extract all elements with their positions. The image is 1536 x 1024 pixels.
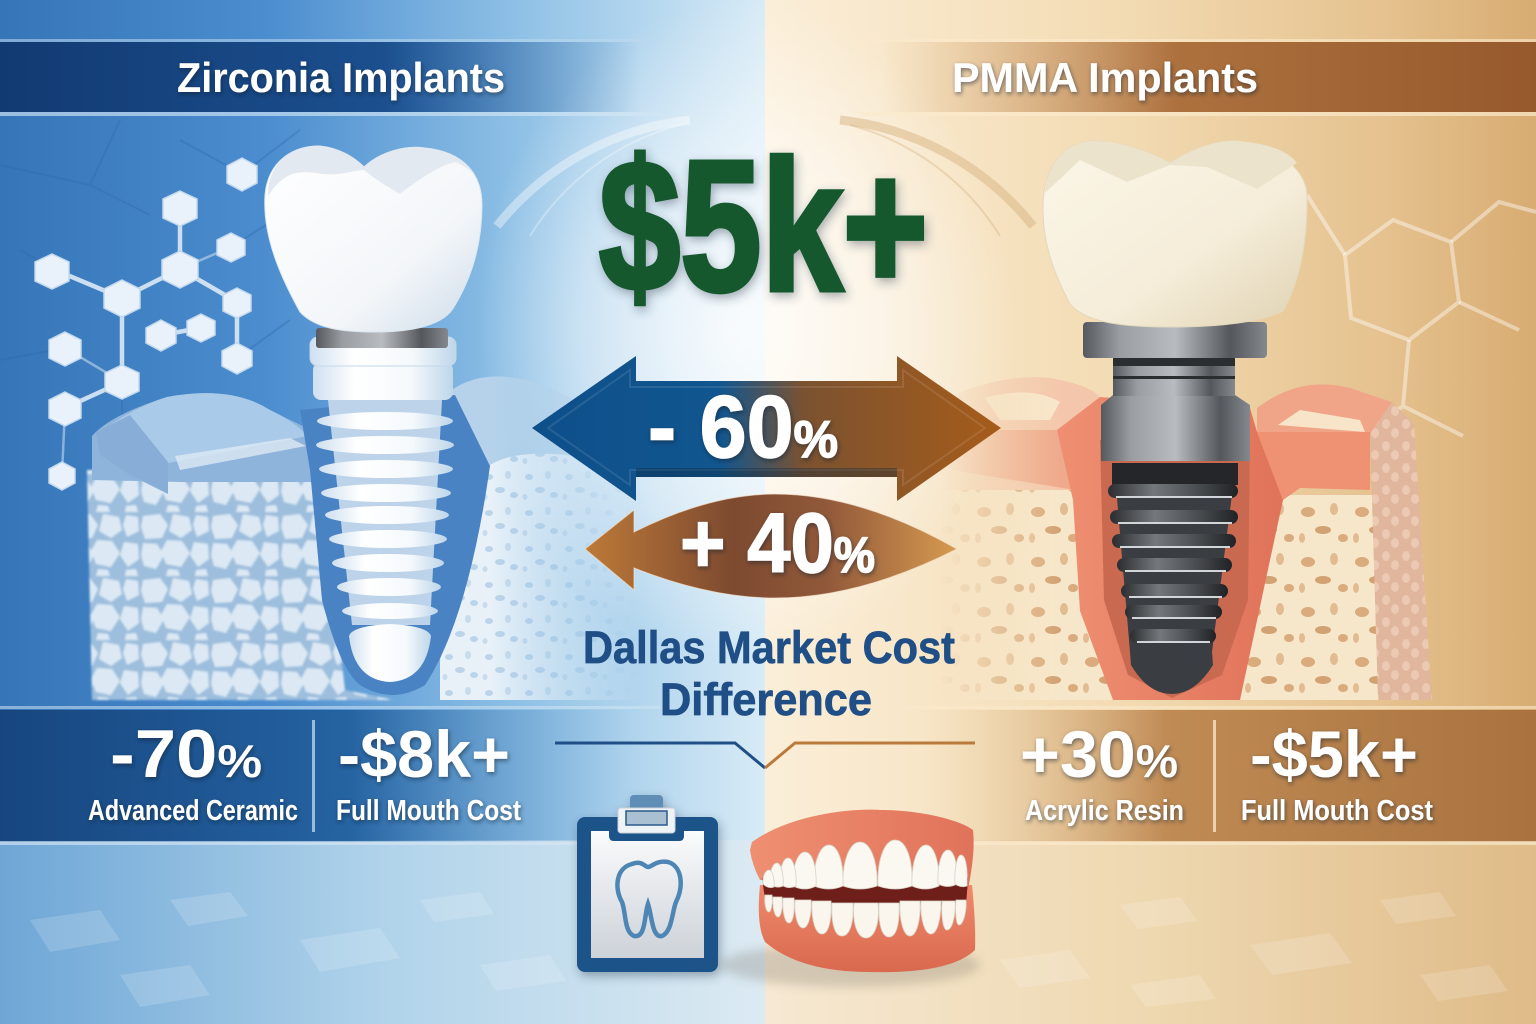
background: blue zirconia half: [0, 0, 765, 1024]
stat: +30%: +30%: [1020, 717, 1178, 791]
bone left block: [87, 470, 395, 700]
bone right block: [440, 376, 618, 700]
gum socket: [1057, 397, 1283, 700]
lower gum: [759, 885, 975, 972]
implant screw: [316, 400, 454, 682]
label: +40%: + 40%: [680, 496, 875, 590]
cream crown: [1043, 141, 1307, 327]
panel: molecule network: [0, 120, 300, 490]
implant abutment: [310, 328, 456, 400]
stat: -$8k+: [336, 717, 521, 827]
icon: clipboard with tooth: [577, 795, 718, 972]
bone left block: [952, 377, 1113, 700]
upper teeth: [763, 840, 967, 889]
stat: -70%: Advanced Ceramic: [88, 795, 298, 827]
central glow: [475, 0, 1015, 660]
panel: zirconia stats band: [0, 706, 660, 845]
floor tile pattern: [30, 892, 1508, 1007]
upper gum: [750, 810, 974, 890]
arrow: left-pointing +40% lens: [585, 494, 957, 598]
illustration: PMMA implant in bone: [930, 141, 1432, 700]
caption: Dallas Market Cost Difference: [583, 622, 955, 725]
stat: +30%: Acrylic Resin: [1025, 795, 1184, 827]
mouth interior: [762, 878, 968, 906]
header band: PMMA: [860, 39, 1536, 116]
stat: -$8k+: Full Mouth Cost: [336, 795, 521, 827]
illustration: zirconia implant in bone: [87, 146, 640, 700]
stat: -$5k+: -$5k+: [1250, 717, 1418, 791]
panel: right faint hexagon network: [1307, 195, 1536, 446]
heading: PMMA Implants: PMMA Implants: [952, 54, 1258, 101]
headline: $5k+: $5k+: [599, 123, 928, 330]
panel: PMMA stats band: [900, 706, 1536, 845]
stat: -$5k+: Full Mouth Cost: [1241, 795, 1433, 827]
stat: +30%: [1020, 717, 1184, 827]
heading: Zirconia Implants: Zirconia Implants: [177, 54, 505, 101]
stat: -70%: [88, 716, 298, 827]
metal screw: [1108, 463, 1238, 694]
divider chevron: [555, 743, 975, 768]
lower teeth: [765, 895, 966, 938]
stat: -$5k+: [1241, 717, 1433, 827]
white crown: [265, 146, 482, 332]
central faint arcs: [497, 120, 1033, 236]
header band: Zirconia: [0, 39, 660, 116]
bone right block: [1230, 495, 1385, 700]
metal abutment: [1083, 322, 1267, 461]
caption: Dallas Market Cost Difference: Dallas Market Cost: [583, 622, 955, 673]
icon: dentures: [720, 810, 980, 987]
caption: Dallas Market Cost Difference: Difference: [660, 674, 872, 725]
arrow: double-headed -60%: [532, 356, 1001, 501]
label: -60%: - 60%: [648, 377, 838, 476]
stat: -70%: -70%: [110, 716, 262, 792]
stat: -$8k+: -$8k+: [338, 717, 510, 791]
socket: [300, 395, 490, 695]
background: tan PMMA half: [765, 0, 1536, 1024]
